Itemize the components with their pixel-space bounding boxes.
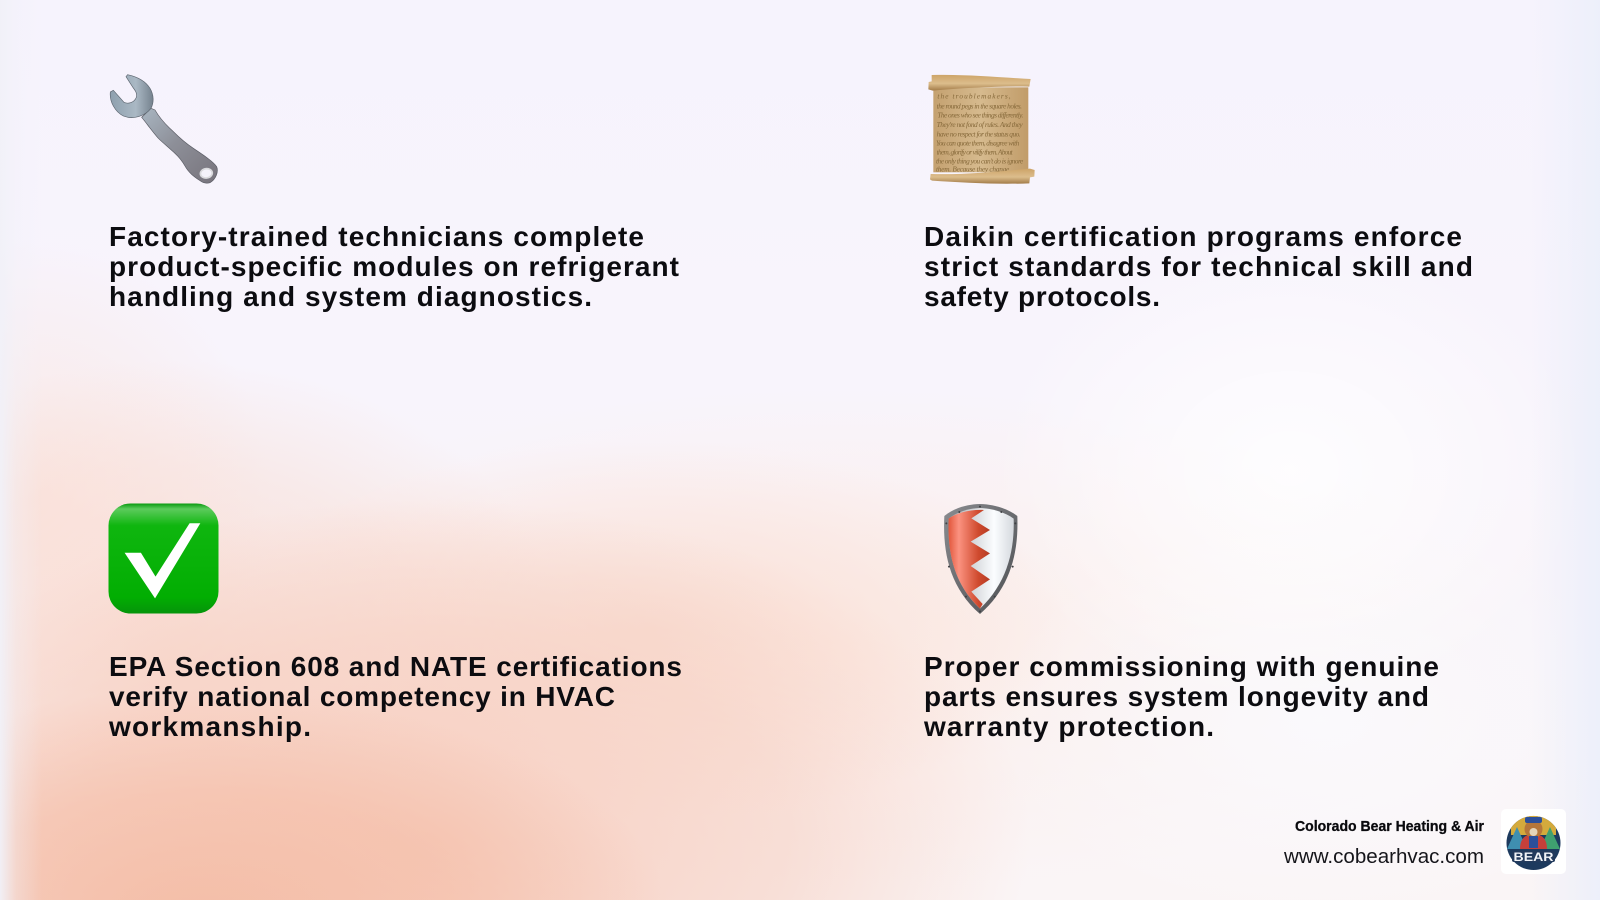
- logo: colorado bear: BEAR: [1514, 850, 1554, 864]
- text: epa section 608: verify national competency in HVAC: [109, 681, 615, 712]
- text: daikin certification: Daikin certification programs enforce: [924, 221, 1462, 252]
- text: daikin certification: safety protocols.: [924, 281, 1160, 312]
- text: factory-trained technicians: product-specific modules on refrigerant: [109, 251, 679, 282]
- text: proper commissioning: parts ensures system longevity and: [924, 681, 1429, 712]
- footer: brand name: Colorado Bear Heating & Air: [1295, 819, 1484, 835]
- text: factory-trained technicians: Factory-trained technicians complete: [109, 221, 644, 252]
- icon: wrench: [110, 75, 217, 183]
- text: daikin certification: [924, 221, 1473, 312]
- text: proper commissioning: [923, 651, 1439, 742]
- icon: parchment scroll: have no respect for the status quo.: [937, 129, 1021, 138]
- text: epa section 608: workmanship.: [108, 711, 311, 742]
- icon: green check mark: [108, 504, 218, 614]
- icon: parchment scroll: the troublemakers,: [937, 92, 1011, 101]
- icon: shield: [944, 504, 1017, 614]
- logo: colorado bear: [1501, 809, 1566, 874]
- text: factory-trained technicians: [109, 221, 679, 312]
- icon: parchment scroll: the round pegs in the square holes.: [937, 102, 1022, 111]
- text: daikin certification: strict standards for technical skill and: [924, 251, 1473, 282]
- icon: parchment scroll: the only thing you can't do is ignore: [936, 157, 1024, 166]
- text: epa section 608: [108, 651, 682, 742]
- icon: parchment scroll: them. Because they change: [936, 165, 1010, 174]
- icon: parchment scroll: The ones who see things differently.: [937, 111, 1023, 120]
- icon: parchment scroll: They're not fond of rules. And they: [937, 120, 1023, 129]
- text: epa section 608: EPA Section 608 and NATE certifications: [109, 651, 682, 682]
- text: factory-trained technicians: handling and system diagnostics.: [109, 281, 592, 312]
- icon: parchment scroll: them, glorify or vilify them. About: [937, 148, 1014, 157]
- text: proper commissioning: Proper commissioning with genuine: [924, 651, 1439, 682]
- footer: website: www.cobearhvac.com: [1283, 846, 1484, 868]
- text: proper commissioning: warranty protection.: [923, 711, 1214, 742]
- icon: parchment scroll: You can quote them, disagree with: [936, 138, 1020, 147]
- icon: parchment scroll: [928, 75, 1035, 184]
